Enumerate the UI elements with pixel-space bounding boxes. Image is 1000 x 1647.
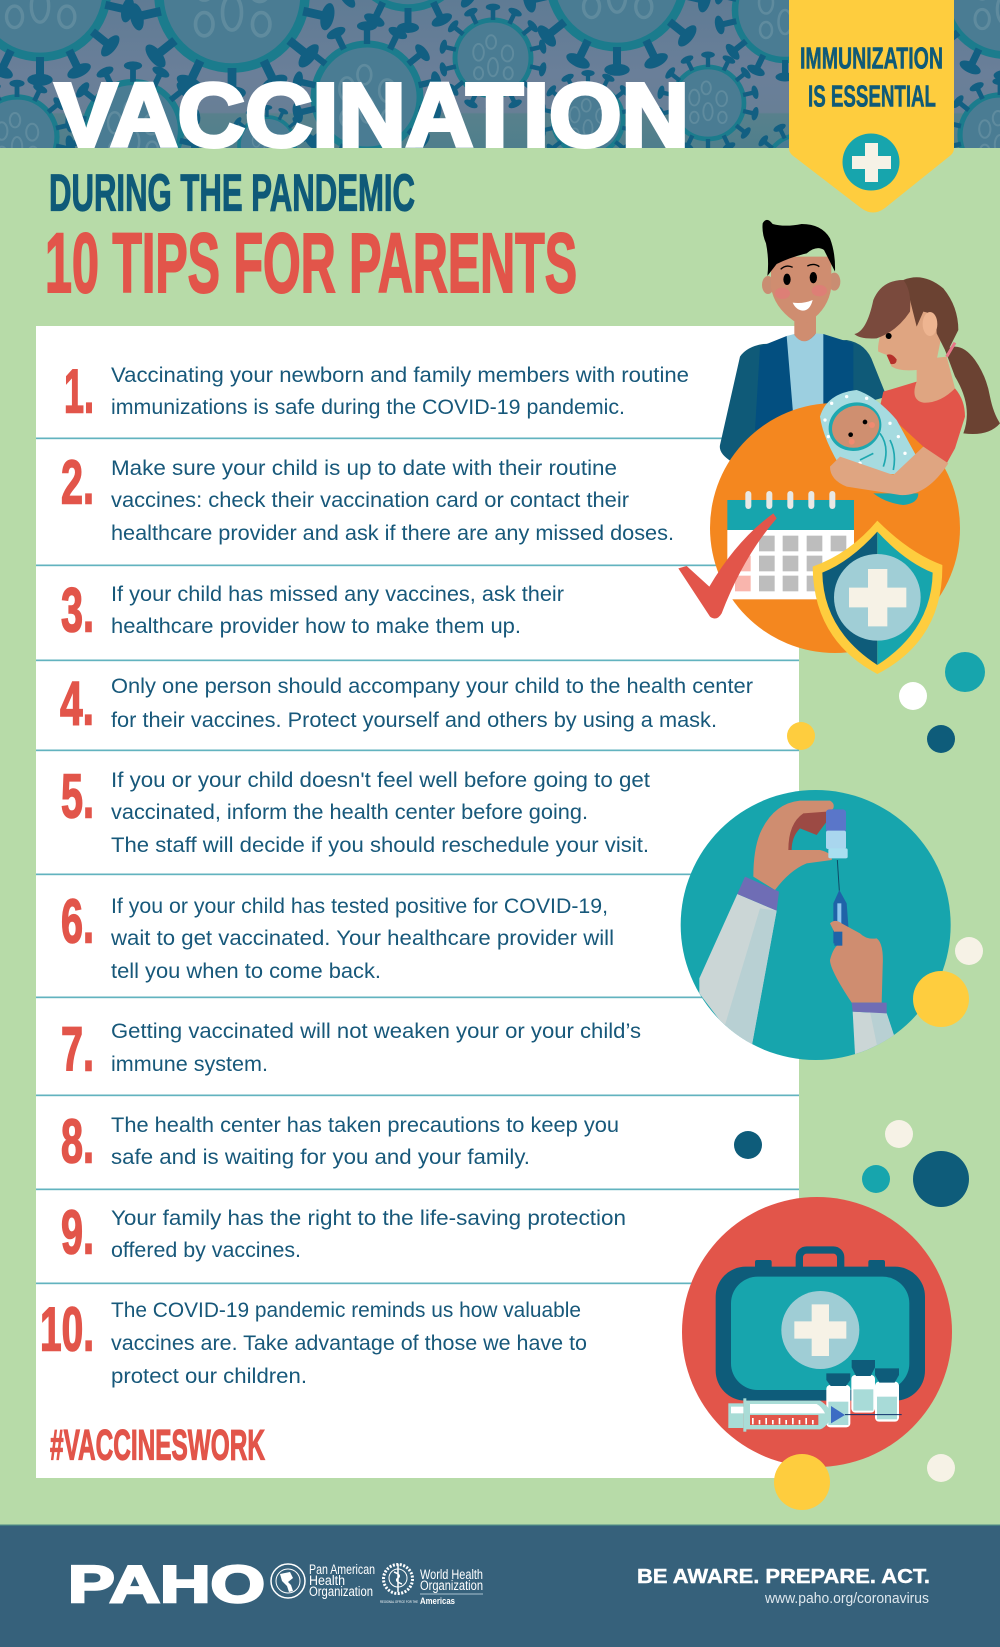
tip 6 — [61, 888, 614, 983]
tip 8: 8. — [61, 1108, 94, 1176]
tip 6: If you or your child has tested positive for COVID-19, — [111, 895, 608, 918]
tip 4: Only one person should accompany your child to the health center — [111, 675, 753, 698]
tip 10 — [40, 1296, 587, 1388]
upper hand — [753, 801, 834, 890]
WHO name: REGIONAL OFFICE FOR THE — [380, 1599, 418, 1604]
tip 10: protect our children. — [111, 1365, 307, 1388]
footer band — [0, 1524, 1000, 1647]
title: VACCINATION: VACCINATION — [55, 66, 689, 166]
tip 9: offered by vaccines. — [111, 1239, 301, 1262]
tip 1 — [64, 358, 689, 426]
calendar — [727, 491, 854, 599]
tip 8 — [61, 1108, 619, 1176]
tip 7 — [61, 1016, 641, 1084]
tip 2 — [61, 448, 674, 545]
panel: tips list — [36, 326, 799, 1478]
tip 5: If you or your child doesn't feel well before going to get — [111, 769, 650, 792]
tip 9: 9. — [61, 1198, 94, 1268]
tip 5: vaccinated, inform the health center before going. — [111, 801, 588, 824]
PAHO name: Pan American — [309, 1562, 375, 1577]
vials — [826, 1360, 899, 1427]
tip 3: healthcare provider how to make them up. — [111, 615, 521, 638]
tip 3: 3. — [61, 576, 94, 646]
header band with virus pattern — [0, 0, 1000, 148]
medical bag — [716, 1250, 925, 1401]
tip 7: 7. — [61, 1016, 94, 1084]
tip 3: If your child has missed any vaccines, ask their — [111, 583, 564, 606]
syringe barrel over hand — [834, 932, 842, 946]
website: www.paho.org/coronavirus — [764, 1590, 929, 1607]
subtitle: during the pandemic: DURING THE PANDEMIC — [49, 164, 415, 222]
illustration: medical kit on red circle — [682, 1197, 952, 1467]
tip 10: 10. — [40, 1296, 94, 1364]
illustration: family, calendar and shield — [678, 220, 1000, 674]
tip 6: tell you when to come back. — [111, 960, 381, 983]
icon: WHO emblem — [384, 1564, 412, 1594]
tip 2: 2. — [61, 448, 94, 518]
illustration: hands with vaccine and syringe — [681, 790, 951, 1060]
red check mark — [678, 513, 777, 619]
shield — [813, 521, 942, 674]
lower hand — [830, 921, 883, 1003]
WHO name: Organization — [420, 1578, 483, 1593]
tip 5: 5. — [61, 762, 94, 832]
heading: 10 tips for parents: 10 TIPS FOR PARENTS — [45, 216, 577, 310]
tip 1: 1. — [64, 358, 94, 426]
tip 6: wait to get vaccinated. Your healthcare provider will — [110, 927, 614, 950]
tip 2: healthcare provider and ask if there are any missed doses. — [111, 522, 674, 545]
tip 2: vaccines: check their vaccination card or contact their — [111, 489, 629, 512]
WHO name — [380, 1567, 483, 1607]
ribbon: immunization is essential — [789, 0, 954, 212]
tip 8: The health center has taken precautions to keep you — [111, 1114, 619, 1137]
tip 10: The COVID-19 pandemic reminds us how valuable — [111, 1299, 581, 1322]
PAHO name: Health — [309, 1573, 345, 1588]
hashtag: #VACCINESWORK — [50, 1422, 265, 1470]
woman and baby — [820, 277, 1000, 505]
slogan: BE AWARE. PREPARE. ACT. — [637, 1566, 930, 1588]
lab coat sleeves — [699, 894, 900, 1060]
tip 2: Make sure your child is up to date with their routine — [111, 457, 617, 480]
tip 1: Vaccinating your newborn and family members with routine — [111, 364, 689, 387]
tip 5: The staff will decide if you should reschedule your visit. — [111, 834, 649, 857]
tip 3 — [61, 576, 564, 646]
tip 10: vaccines are. Take advantage of those we have to — [111, 1332, 587, 1355]
tip 1: immunizations is safe during the COVID-19 pandemic. — [111, 396, 625, 419]
PAHO logo text: PAHO — [68, 1556, 265, 1614]
PAHO name: Organization — [309, 1584, 373, 1599]
syringe — [728, 1398, 902, 1432]
decorative dots — [734, 652, 985, 1510]
tip 4 — [60, 670, 753, 738]
needle and syringe — [833, 860, 849, 943]
icon: PAHO globe emblem — [271, 1564, 305, 1598]
WHO name: World Health — [420, 1567, 483, 1582]
tip 7: immune system. — [111, 1053, 268, 1076]
tip 4: 4. — [60, 670, 94, 738]
tip 6: 6. — [61, 888, 94, 956]
tip 5 — [61, 762, 650, 857]
man — [720, 220, 887, 462]
WHO name: Americas — [420, 1596, 455, 1607]
orange circle — [710, 403, 960, 653]
tip 4: for their vaccines. Protect yourself and others by using a mask. — [111, 709, 717, 732]
tip 7: Getting vaccinated will not weaken your or your child’s — [111, 1020, 641, 1043]
tip 9: Your family has the right to the life-saving protection — [111, 1207, 626, 1230]
tip 9 — [61, 1198, 626, 1268]
tip 8: safe and is waiting for you and your family. — [111, 1146, 530, 1169]
vaccine vial — [826, 809, 848, 858]
PAHO name — [309, 1562, 375, 1599]
